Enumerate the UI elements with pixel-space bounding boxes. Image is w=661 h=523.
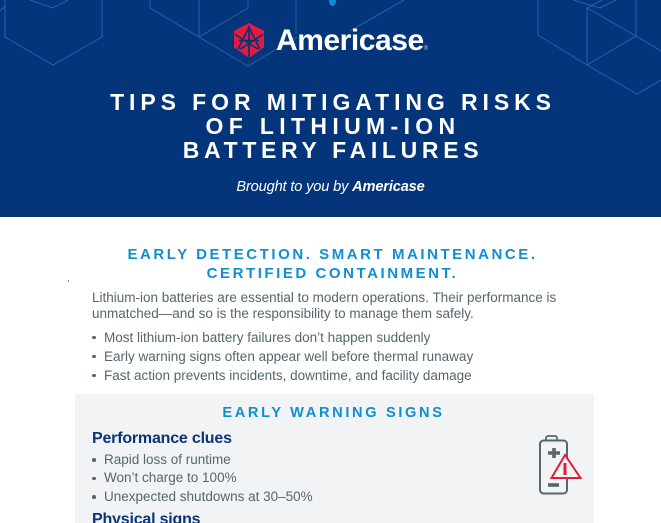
intro bullet list: Early warning signs often appear well before thermal runaway — [104, 348, 473, 364]
logo: Americase — [234, 23, 428, 58]
performance clues list: Unexpected shutdowns at 30–50% — [104, 489, 313, 504]
intro paragraph: unmatched—and so is the responsibility to manage them safely. — [92, 306, 474, 321]
icon: red hexagon mark — [234, 23, 264, 58]
panel heading: EARLY WARNING SIGNS — [222, 405, 445, 421]
intro bullet list: Most lithium-ion battery failures don’t happen suddenly — [104, 330, 430, 344]
title: OF LITHIUM-ION — [205, 113, 461, 139]
accent dot — [329, 0, 336, 6]
title — [110, 89, 556, 163]
title: TIPS FOR MITIGATING RISKS — [110, 89, 556, 115]
performance clues list — [92, 452, 313, 504]
performance clues list: Rapid loss of runtime — [104, 452, 231, 466]
subheading: CERTIFIED CONTAINMENT. — [207, 265, 458, 282]
title: BATTERY FAILURES — [183, 137, 483, 163]
heading: performance clues: Performance clues — [92, 430, 232, 447]
hexagon line pattern — [0, 0, 661, 94]
byline: Brought to you by Americase — [236, 179, 425, 195]
stray speck — [68, 280, 69, 282]
intro bullet list: Fast action prevents incidents, downtime, and facility damage — [104, 368, 472, 382]
subheading — [127, 246, 538, 282]
logo wordmark: Americase® — [276, 24, 428, 57]
icon: battery with warning triangle — [539, 435, 582, 494]
intro bullet list — [92, 330, 474, 383]
intro paragraph — [92, 290, 556, 321]
panel: early warning signs — [75, 394, 594, 523]
intro paragraph: Lithium-ion batteries are essential to modern operations. Their performance is — [92, 290, 556, 305]
performance clues list: Won’t charge to 100% — [104, 470, 237, 485]
subheading: EARLY DETECTION. SMART MAINTENANCE. — [127, 246, 538, 263]
header banner — [0, 0, 661, 217]
